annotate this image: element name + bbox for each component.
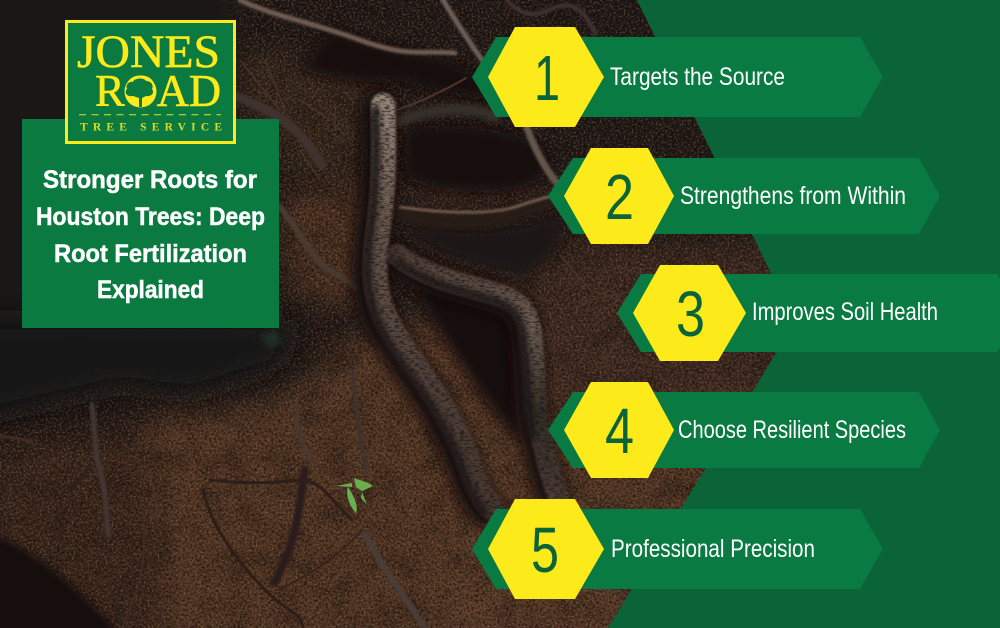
- leaf sprout: [336, 478, 373, 513]
- title panel: Explained: [97, 276, 204, 304]
- step 4: Choose Resilient Species: Choose Resilient Species: [678, 416, 906, 444]
- step 2: Strengthens from Within: 2: [605, 161, 634, 233]
- main root trunk: [369, 107, 486, 510]
- step 1: Targets the Source: 1: [534, 42, 560, 114]
- step 1: Targets the Source: Targets the Source: [610, 63, 785, 91]
- logo: Jones Road Tree Service: TREE SERVICE: [80, 122, 222, 134]
- title panel: Root Fertilization: [54, 240, 247, 268]
- second large root: [392, 258, 553, 498]
- roots: [0, 0, 640, 628]
- dark green diagonal panel: [608, 0, 1000, 628]
- step 1: Targets the Source: [472, 27, 883, 127]
- step 4: Choose Resilient Species: [548, 382, 940, 478]
- step 2: Strengthens from Within: [548, 148, 940, 244]
- step 3: Improves Soil Health: Improves Soil Health: [752, 298, 938, 326]
- step 2: Strengthens from Within: Strengthens from Within: [680, 182, 906, 210]
- step 5: Professional Precision: Professional Precision: [611, 535, 815, 563]
- title panel: [22, 119, 279, 328]
- logo: Jones Road Tree Service: JONES: [77, 26, 220, 78]
- icon: tree in the O: [124, 76, 156, 108]
- title panel: Stronger Roots for: [43, 166, 257, 194]
- twigs: [150, 60, 640, 625]
- logo: Jones Road Tree Service: ROAD: [95, 66, 221, 116]
- logo: Jones Road Tree Service: [66, 22, 234, 142]
- step 5: Professional Precision: 5: [531, 514, 559, 586]
- step 5: Professional Precision: [472, 499, 883, 599]
- soil texture: mottling, dark flecks and light flecks: [0, 0, 776, 628]
- dark shadow regions: [0, 30, 561, 628]
- step 3: Improves Soil Health: 3: [676, 278, 705, 350]
- bark texture on the big roots: [364, 93, 569, 520]
- step 3: Improves Soil Health: [617, 265, 1000, 361]
- small ground roots: [352, 370, 366, 472]
- background photo: forest floor with exposed roots: [0, 0, 776, 628]
- step 4: Choose Resilient Species: 4: [605, 395, 634, 467]
- soil patches: [0, 50, 800, 628]
- moss patch: [260, 331, 284, 348]
- title panel: Houston Trees: Deep: [36, 203, 265, 231]
